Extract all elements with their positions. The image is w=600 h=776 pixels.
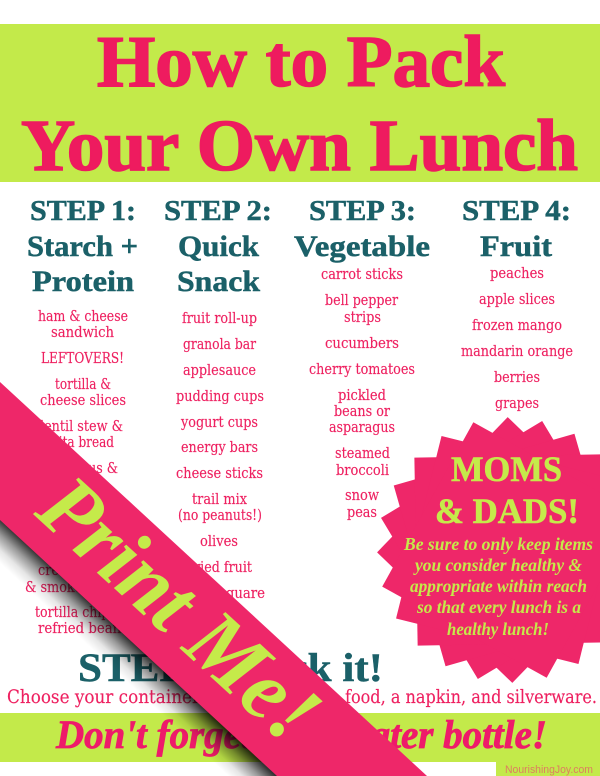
list: fruit items: grapes (495, 394, 539, 412)
list: fruit items (461, 264, 573, 412)
heading: step 5: STEP 5: Pack it! (78, 645, 383, 690)
callout text: appropriate within reach (410, 576, 587, 596)
list: starch + protein items: & smoked salmon (25, 578, 141, 596)
list: quick snack items: chocolate square (150, 584, 265, 602)
heading: step 4: STEP 4: (462, 196, 571, 227)
title: Your Own Lunch (21, 105, 578, 186)
list: fruit items: peaches (490, 264, 544, 282)
heading: step 1: Starch + (27, 230, 138, 263)
heading: step 1 (27, 196, 138, 298)
callout text: Be sure to only keep items (403, 534, 593, 554)
heading: step 2: STEP 2: (164, 196, 272, 227)
list: vegetable items (309, 265, 415, 521)
callout: moms and dads starburst (377, 417, 600, 683)
credit: nourishingjoy.com: NourishingJoy.com (505, 764, 593, 776)
list: vegetable items: steamed (335, 444, 390, 462)
list: quick snack items: pudding cups (176, 387, 264, 405)
callout heading: MOMS (451, 449, 562, 489)
heading: step 2: Quick (178, 230, 259, 263)
heading: step 1: STEP 1: (30, 196, 136, 227)
list: vegetable items: bell pepper (325, 291, 399, 309)
callout heading (435, 449, 579, 531)
list: quick snack items: dried fruit (186, 558, 252, 576)
list: vegetable items: beans or (334, 402, 391, 420)
heading: step 3: STEP 3: (309, 196, 416, 227)
ribbon text: Print Me! (19, 457, 339, 762)
heading: step 4: Fruit (480, 230, 552, 263)
list: quick snack items: energy bars (181, 438, 258, 456)
callout text (403, 534, 593, 639)
list: starch + protein items: LEFTOVERS! (41, 349, 124, 367)
heading: step 2 (164, 196, 272, 298)
column: step 1 starch + protein (25, 196, 141, 637)
list: vegetable items: cucumbers (325, 334, 399, 352)
list: starch + protein items (25, 307, 141, 637)
list: starch + protein items: tortilla & (55, 375, 111, 393)
callout text: healthy lunch! (447, 619, 549, 639)
heading: step 1: Protein (32, 265, 134, 298)
list: vegetable items: strips (344, 308, 381, 326)
list: starch + protein items: pita bread (51, 433, 114, 451)
callout text: you consider healthy & (413, 555, 582, 575)
title band (0, 21, 600, 186)
list: starch + protein items: sandwich (51, 323, 114, 341)
list: vegetable items: cherry tomatoes (309, 360, 415, 378)
list: starch + protein items: ham & cheese (38, 307, 128, 325)
list: quick snack items: (no peanuts!) (178, 506, 262, 524)
reminder band (0, 712, 600, 762)
list: starch + protein items: cream cheese (38, 561, 128, 579)
title: How to Pack (97, 21, 505, 102)
title (21, 21, 578, 186)
list: starch + protein items: refried beans (38, 619, 128, 637)
heading: step 4 (462, 196, 571, 263)
heading: step 3 (294, 196, 430, 263)
list: quick snack items: cheese sticks (176, 464, 263, 482)
list: fruit items: frozen mango (472, 316, 562, 334)
column: step 4 fruit (461, 196, 573, 412)
list: vegetable items: peas (347, 503, 377, 521)
list: vegetable items: pickled (338, 386, 386, 404)
callout text: so that every lunch is a (416, 597, 581, 617)
list: vegetable items: asparagus (329, 418, 395, 436)
list: starch + protein items: hummus & (48, 459, 118, 477)
list: starch + protein items: lentil stew & (40, 417, 123, 435)
list: vegetable items: snow (345, 486, 379, 504)
heading: step 2: Snack (177, 265, 260, 298)
list: quick snack items: granola bar (183, 335, 257, 353)
list: quick snack items: trail mix (192, 490, 247, 508)
list: quick snack items: olives (200, 532, 238, 550)
list: starch + protein items: tortilla chips & (35, 603, 131, 621)
list: quick snack items: yogurt cups (180, 413, 258, 431)
callout heading: & DADS! (435, 491, 579, 531)
text: step 5 instructions: Choose your containers, (7, 686, 214, 708)
list: quick snack items: fruit roll-up (182, 309, 257, 327)
list: fruit items: berries (494, 368, 540, 386)
list: fruit items: mandarin orange (461, 342, 573, 360)
icon: starburst (377, 417, 600, 683)
list: quick snack items (150, 309, 265, 602)
column: step 3 vegetable (294, 196, 430, 521)
column: step 2 quick snack (150, 196, 272, 602)
reminder text: Don't forget your water bottle! (55, 712, 547, 757)
list: vegetable items: carrot sticks (321, 265, 403, 283)
banner shadow (0, 515, 285, 776)
list: fruit items: apple slices (479, 290, 555, 308)
list: quick snack items: applesauce (183, 361, 256, 379)
list: starch + protein items: cheese slices (40, 391, 126, 409)
list: vegetable items: broccoli (336, 461, 389, 479)
text: step 5 instructions (7, 686, 597, 708)
text: step 5 instructions: add your (224, 686, 337, 708)
heading: step 3: Vegetable (294, 230, 430, 263)
